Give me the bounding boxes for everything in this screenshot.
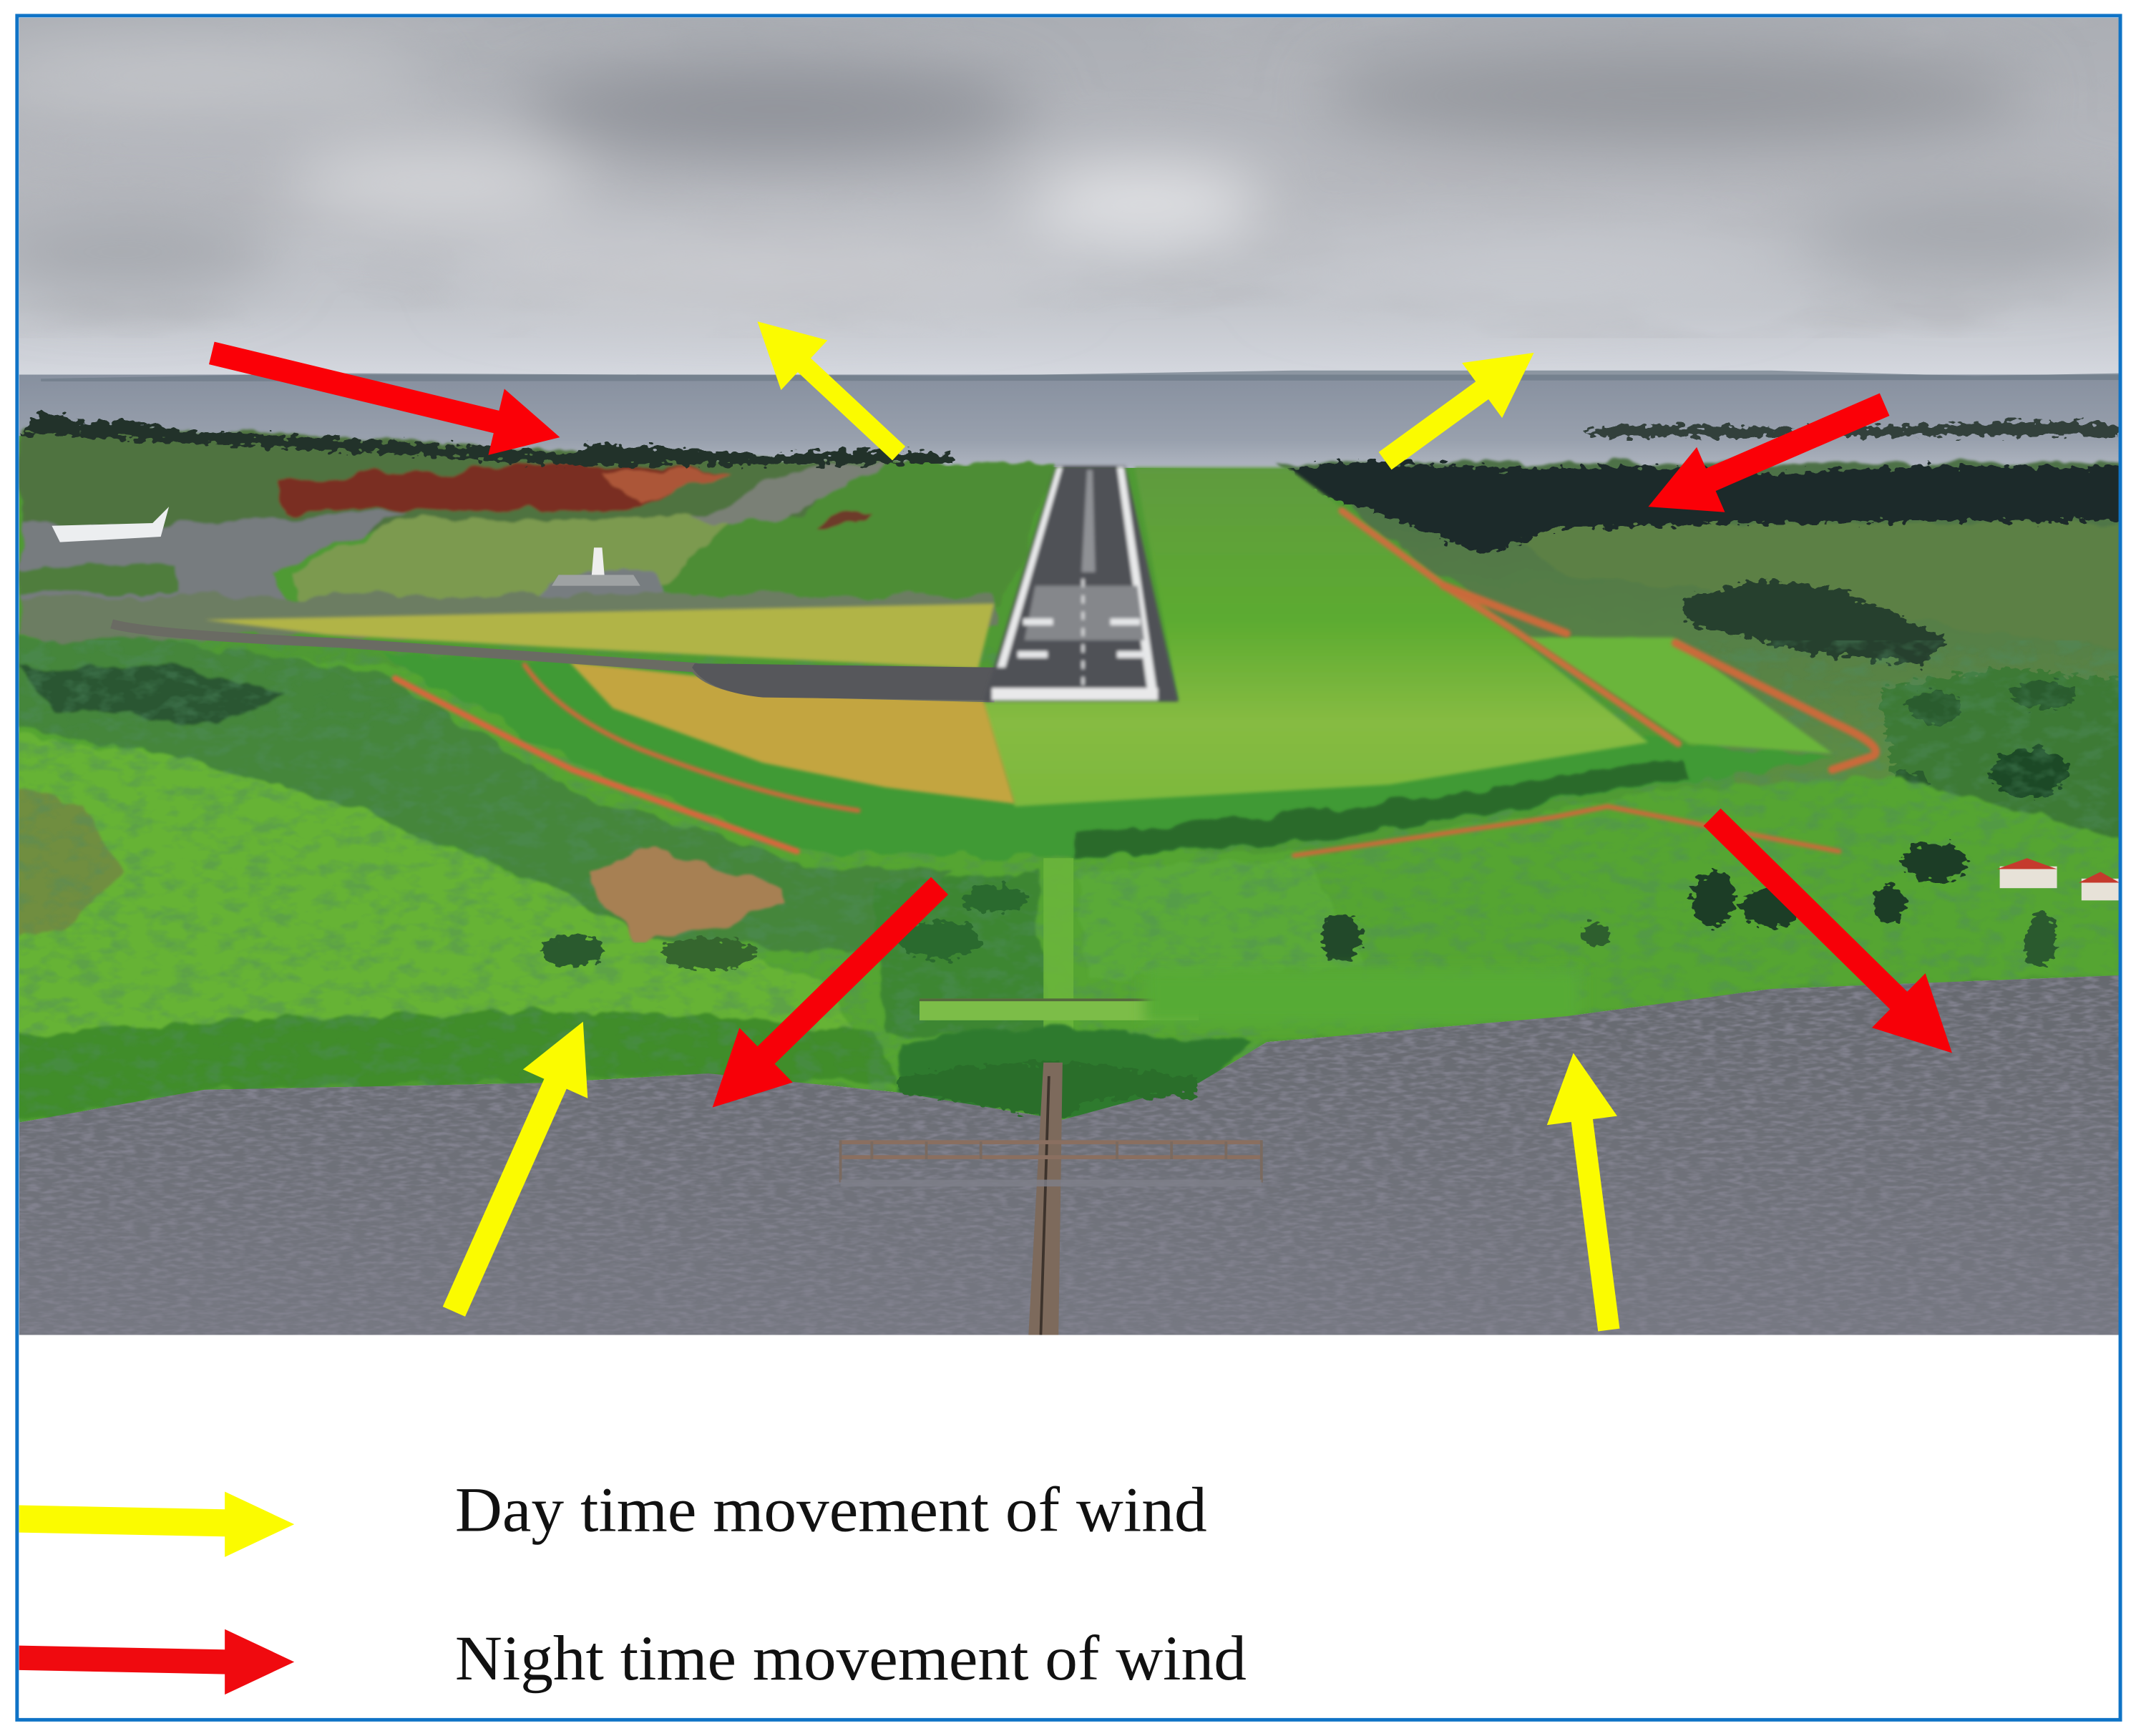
sky with clouds [0,18,2136,379]
runway [983,466,1179,701]
red dirt roads [395,511,1876,855]
panel: aerial photograph of runway and lake [0,18,2136,1335]
arrow: night wind, far right [1634,372,1898,540]
arrow: night wind, lower right [1685,790,1979,1081]
dark tree belts on right shore [1287,460,2136,844]
olive field left of the runway [205,603,995,669]
light green strip between the access roads [1528,638,1832,754]
lower foreground meadow [19,640,2136,1123]
left green meadow and shrubs [14,640,1362,1123]
approach-light clearing [899,858,1580,1120]
right field and far wetland [1274,463,2136,981]
arrow: night wind, far left [204,320,568,470]
dark shrub band below the embankment [1076,757,1689,858]
mottled vegetation texture over the lower land [19,640,2120,1124]
arrow: day wind, top centre-left [734,296,922,478]
distant lake [19,371,2119,469]
rocks and scattered trees in the meadow [542,843,2057,970]
arrow: day wind, top centre-right [1365,326,1554,489]
yellow field beside the taxiway [570,662,1015,804]
parked aircraft [52,507,640,632]
base ground under the airfield and meadows [19,436,2120,1123]
legend arrow: night wind [19,1629,294,1694]
houses with red roofs [1997,858,2120,900]
arrow: day wind, lower right [1538,1048,1644,1335]
arrow: day wind, lower left [421,1008,615,1326]
legend arrow: day wind [19,1491,294,1557]
embankment around the runway [381,654,1839,858]
approach light jetty and crossbar [841,1063,1262,1335]
treeline on left shore [19,411,954,466]
main right green field [981,467,1648,806]
legend label: day wind: Day time movement of wind [455,1475,1207,1546]
shrubs on the foreground point [899,1063,1199,1120]
left shore hill and apron [19,428,1055,648]
legend label: night wind: Night time movement of wind [455,1623,1247,1694]
taxiway curve [112,624,995,698]
lake in the foreground [19,975,2120,1335]
legend: day and night wind key [19,1475,1247,1694]
arrow: night wind, lower centre [686,859,966,1135]
island on the lake [1584,421,2120,437]
